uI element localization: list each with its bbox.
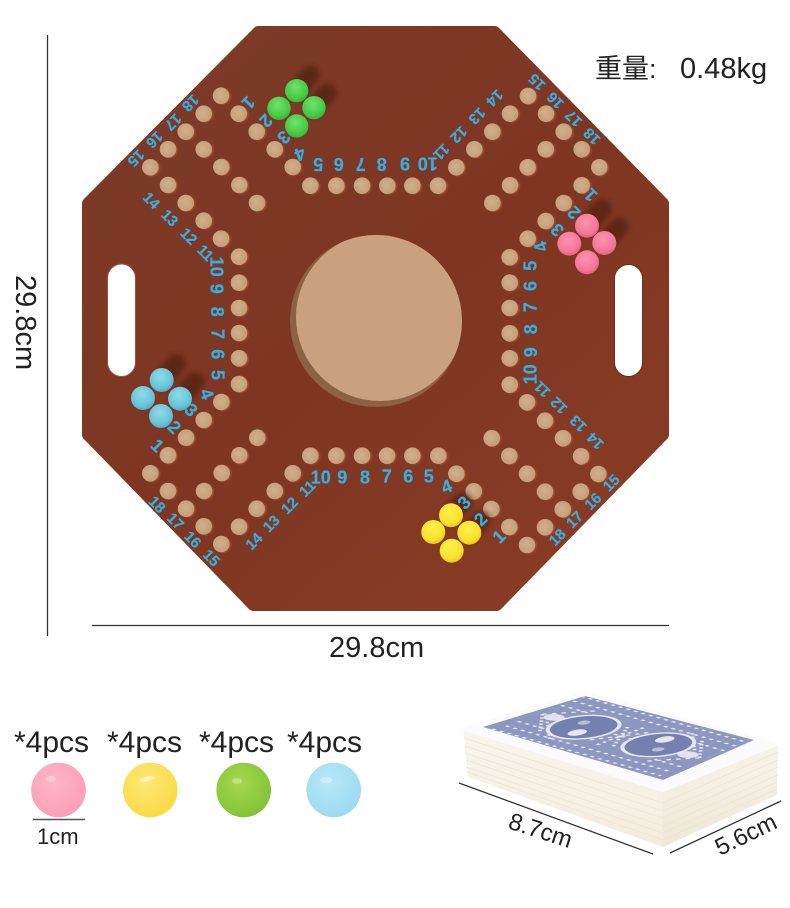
numbers: green track: 5 — [313, 154, 323, 174]
numbers: blue track: 17 — [161, 110, 185, 134]
numbers: green track: 14 — [482, 86, 506, 110]
numbers: green track: 7 — [356, 154, 366, 174]
left handle slot — [108, 264, 136, 376]
marble size scale — [33, 820, 85, 849]
numbers: pink track: 9 — [521, 347, 541, 357]
numbers: green track: 11 — [429, 140, 453, 163]
numbers: yellow track: 10 — [311, 468, 331, 488]
numbers: pink track — [521, 184, 624, 550]
marble: yellow: *4pcs — [107, 726, 182, 759]
holes: pink track — [501, 177, 607, 553]
holes: yellow track — [142, 447, 518, 552]
numbers: blue track: 16 — [142, 127, 166, 151]
numbers: yellow track: 13 — [260, 512, 284, 536]
numbers: pink track: 13 — [567, 411, 591, 435]
numbers: green track: 4 — [292, 143, 308, 165]
numbers: blue track: 9 — [207, 284, 227, 294]
numbers: green track: 8 — [377, 154, 387, 174]
numbers: green track: 18 — [580, 124, 604, 148]
numbers: pink track: 1 — [580, 184, 601, 206]
deck right side — [663, 743, 778, 847]
card deck — [463, 691, 778, 847]
numbers: blue track: 10 — [207, 257, 227, 277]
numbers: green track: 15 — [525, 70, 549, 94]
green marbles — [267, 79, 326, 138]
marble: green — [199, 726, 274, 817]
numbers: green track: 10 — [418, 154, 438, 174]
numbers: pink track: 7 — [521, 302, 541, 312]
numbers: yellow track — [145, 467, 510, 570]
numbers: yellow track: 3 — [454, 492, 475, 513]
numbers: yellow track: 9 — [337, 468, 347, 488]
marble: pink — [14, 726, 89, 817]
numbers: yellow track: 6 — [403, 467, 413, 487]
marble: pink: *4pcs — [14, 726, 89, 759]
numbers: blue track: 12 — [176, 225, 200, 249]
numbers: yellow track: 2 — [470, 509, 491, 530]
numbers: pink track: 12 — [547, 393, 571, 417]
numbers: yellow track: 15 — [199, 546, 223, 570]
numbers: blue track: 13 — [157, 206, 181, 230]
numbers: yellow track: 16 — [180, 528, 204, 552]
marble: blue — [287, 726, 362, 817]
card back pattern — [483, 696, 754, 780]
deck left side — [463, 728, 663, 847]
numbers: pink track: 17 — [563, 508, 587, 532]
numbers: pink track: 3 — [547, 219, 568, 241]
numbers: blue track: 15 — [124, 146, 148, 170]
numbers: green track: 9 — [400, 153, 410, 173]
weight label: 0.48kg — [680, 53, 767, 85]
numbers: pink track: 16 — [581, 490, 605, 514]
numbers: blue track: 5 — [208, 370, 228, 380]
game board — [87, 31, 664, 606]
marble: blue: *4pcs — [287, 726, 362, 759]
numbers: yellow track: 17 — [163, 510, 187, 534]
numbers: pink track: 6 — [521, 281, 541, 291]
weight label: 重量: — [595, 54, 657, 84]
numbers: yellow track: 14 — [242, 529, 267, 554]
numbers: blue track — [124, 91, 228, 456]
numbers: yellow track: 7 — [382, 467, 392, 487]
numbers: green track: 6 — [334, 154, 344, 174]
numbers: yellow track: 1 — [488, 526, 510, 547]
numbers: yellow track: 12 — [278, 494, 302, 518]
yellow marbles — [421, 503, 481, 563]
board height dimension: 29.8cm — [9, 275, 41, 370]
numbers: pink track: 18 — [546, 526, 570, 550]
marble size scale: 1cm — [37, 824, 79, 849]
holes: blue track — [142, 87, 247, 464]
numbers: yellow track: 8 — [360, 468, 370, 488]
card width dimension — [670, 801, 781, 861]
numbers: pink track: 14 — [583, 428, 608, 453]
numbers: yellow track: 11 — [296, 477, 319, 501]
marble shadows — [162, 75, 619, 533]
numbers: yellow track: 4 — [439, 476, 455, 498]
numbers: yellow track: 18 — [145, 493, 169, 517]
numbers: green track: 17 — [562, 106, 586, 130]
blue marbles — [131, 368, 192, 428]
numbers: blue track: 6 — [207, 349, 227, 359]
card width dimension: 5.6cm — [711, 808, 781, 861]
board body — [87, 31, 664, 606]
deck top card — [465, 693, 776, 790]
numbers: pink track: 10 — [521, 364, 541, 384]
board width dimension: 29.8cm — [329, 632, 424, 664]
numbers: pink track: 5 — [521, 261, 541, 271]
numbers: yellow track: 5 — [424, 467, 434, 487]
numbers: green track: 3 — [273, 127, 294, 148]
numbers: green track: 1 — [238, 92, 259, 113]
numbers: pink track: 11 — [531, 377, 554, 401]
numbers: blue track: 1 — [147, 435, 168, 456]
numbers: green track: 2 — [255, 110, 277, 131]
numbers: green track — [238, 70, 604, 174]
marble: green: *4pcs — [199, 726, 274, 759]
numbers: pink track: 15 — [600, 471, 624, 495]
numbers: blue track: 4 — [196, 386, 218, 402]
centre recess — [290, 233, 464, 407]
marble: yellow — [107, 726, 182, 817]
numbers: blue track: 3 — [180, 399, 202, 421]
numbers: blue track: 11 — [193, 242, 217, 265]
holes: home rows — [195, 141, 554, 500]
numbers: pink track: 8 — [521, 324, 541, 334]
numbers: blue track: 2 — [164, 417, 185, 438]
card length dimension — [459, 783, 653, 854]
numbers: pink track: 2 — [563, 202, 585, 223]
numbers: blue track: 14 — [139, 189, 163, 213]
numbers: green track: 12 — [446, 122, 470, 146]
numbers: pink track: 4 — [530, 239, 552, 255]
pink marbles — [557, 214, 616, 274]
right handle slot — [614, 264, 642, 376]
numbers: blue track: 18 — [178, 91, 202, 115]
holes: green track — [230, 88, 608, 194]
numbers: green track: 13 — [465, 104, 489, 128]
card length dimension: 8.7cm — [505, 808, 576, 854]
numbers: green track: 16 — [544, 88, 568, 112]
numbers: blue track: 8 — [207, 307, 227, 317]
numbers: blue track: 7 — [207, 329, 227, 339]
